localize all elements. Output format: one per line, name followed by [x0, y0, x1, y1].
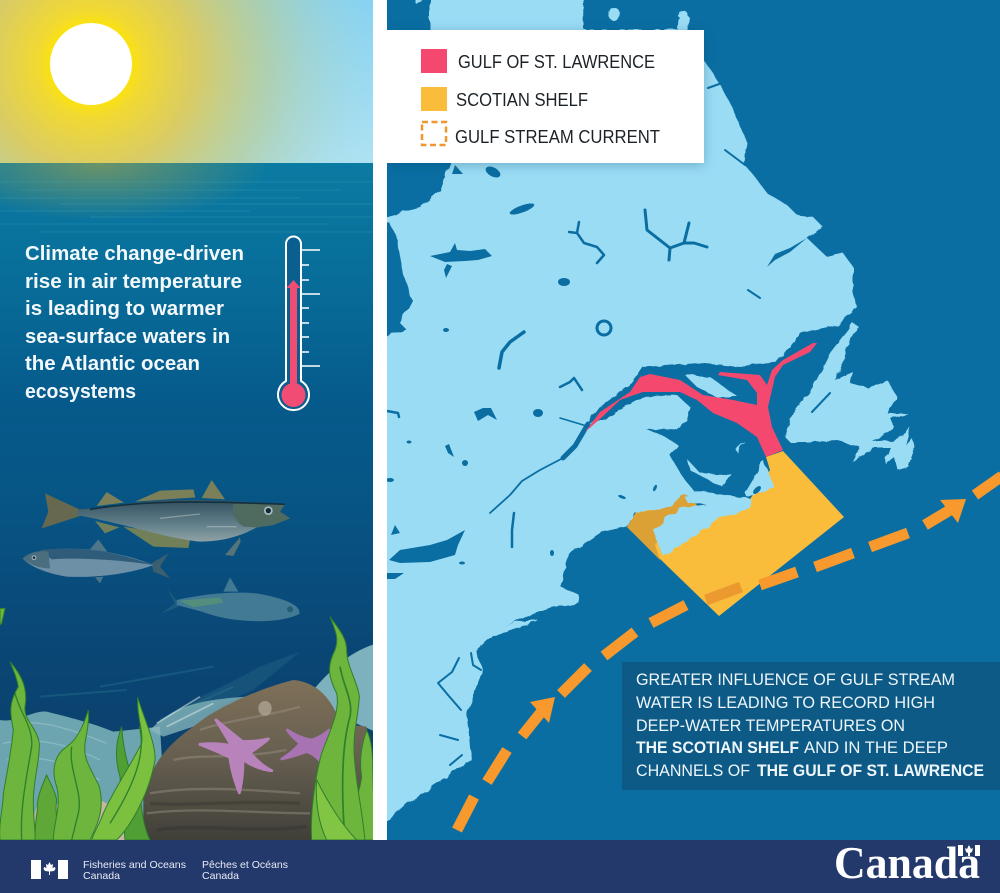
- icon: starfish 1: [200, 720, 272, 793]
- panel: map of Atlantic Canada: [365, 0, 1000, 840]
- map region: Scotian Shelf: [627, 451, 844, 616]
- department name French: Canada: [202, 870, 239, 882]
- ocean background: [387, 0, 1000, 840]
- department name French: [202, 859, 288, 882]
- text block: climate change statement: rise in air temperature: [25, 271, 242, 293]
- icon: sun: [50, 23, 132, 105]
- text block: climate change statement: sea-surface waters in: [25, 326, 230, 348]
- land: Newfoundland: [785, 323, 915, 470]
- text block: climate change statement: ecosystems: [25, 381, 136, 403]
- text block: climate change statement: the Atlantic ocean: [25, 353, 200, 375]
- callout: Gulf Stream text box: CHANNELS OF: [636, 761, 750, 780]
- department name English: Canada: [83, 870, 120, 882]
- illustration: right kelp: [311, 617, 365, 840]
- legend: SCOTIAN SHELF: [456, 89, 588, 110]
- callout: Gulf Stream text box: DEEP-WATER TEMPERATURES ON: [636, 716, 905, 735]
- text block: climate change statement: Climate change-driven: [25, 243, 244, 265]
- department name English: Fisheries and Oceans: [83, 859, 186, 871]
- sea water: [0, 163, 373, 760]
- illustration: faint distant fish: [162, 577, 300, 621]
- callout: Gulf Stream text box: [622, 662, 1000, 790]
- icon: starfish 2: [282, 730, 329, 765]
- land: Anticosti: [685, 375, 738, 397]
- legend: [387, 30, 704, 163]
- sky: [0, 0, 373, 163]
- callout: Gulf Stream text box: WATER IS LEADING TO RECORD HIGH: [636, 693, 935, 712]
- legend: GULF OF ST. LAWRENCE: [458, 51, 655, 72]
- footer band: [0, 837, 1000, 893]
- map region: Gulf of St. Lawrence: [585, 343, 817, 457]
- Canada wordmark: Canada: [834, 837, 980, 888]
- map: land masses: [365, 0, 915, 840]
- callout: Gulf Stream text box: THE GULF OF ST. LAWRENCE: [757, 761, 984, 780]
- icon: thermometer: [278, 237, 320, 410]
- text block: climate change statement: [25, 243, 244, 403]
- callout: Gulf Stream text box: GREATER INFLUENCE OF GULF STREAM: [636, 670, 955, 689]
- callout: Gulf Stream text box: THE SCOTIAN SHELF: [636, 738, 799, 757]
- legend: GULF STREAM CURRENT: [455, 126, 660, 147]
- department name English: [83, 859, 186, 882]
- land: Prince Edward Island: [688, 460, 732, 487]
- illustration: small fish: [23, 539, 170, 583]
- callout: Gulf Stream text box: AND IN THE DEEP: [804, 738, 948, 757]
- illustration: seabed, rock and kelp: [0, 608, 375, 840]
- land: Nova Scotia: [653, 490, 752, 556]
- illustration: large fish: [42, 480, 290, 556]
- department name French: Pêches et Océans: [202, 859, 288, 871]
- icon: Canadian flag signature: [31, 860, 68, 879]
- arrow: Gulf Stream current: [457, 476, 1000, 830]
- map: lakes and rivers: [386, 164, 807, 579]
- land: Cape Breton: [745, 460, 775, 498]
- text block: climate change statement: is leading to warmer: [25, 298, 224, 320]
- panel: left ocean scene: [0, 0, 375, 840]
